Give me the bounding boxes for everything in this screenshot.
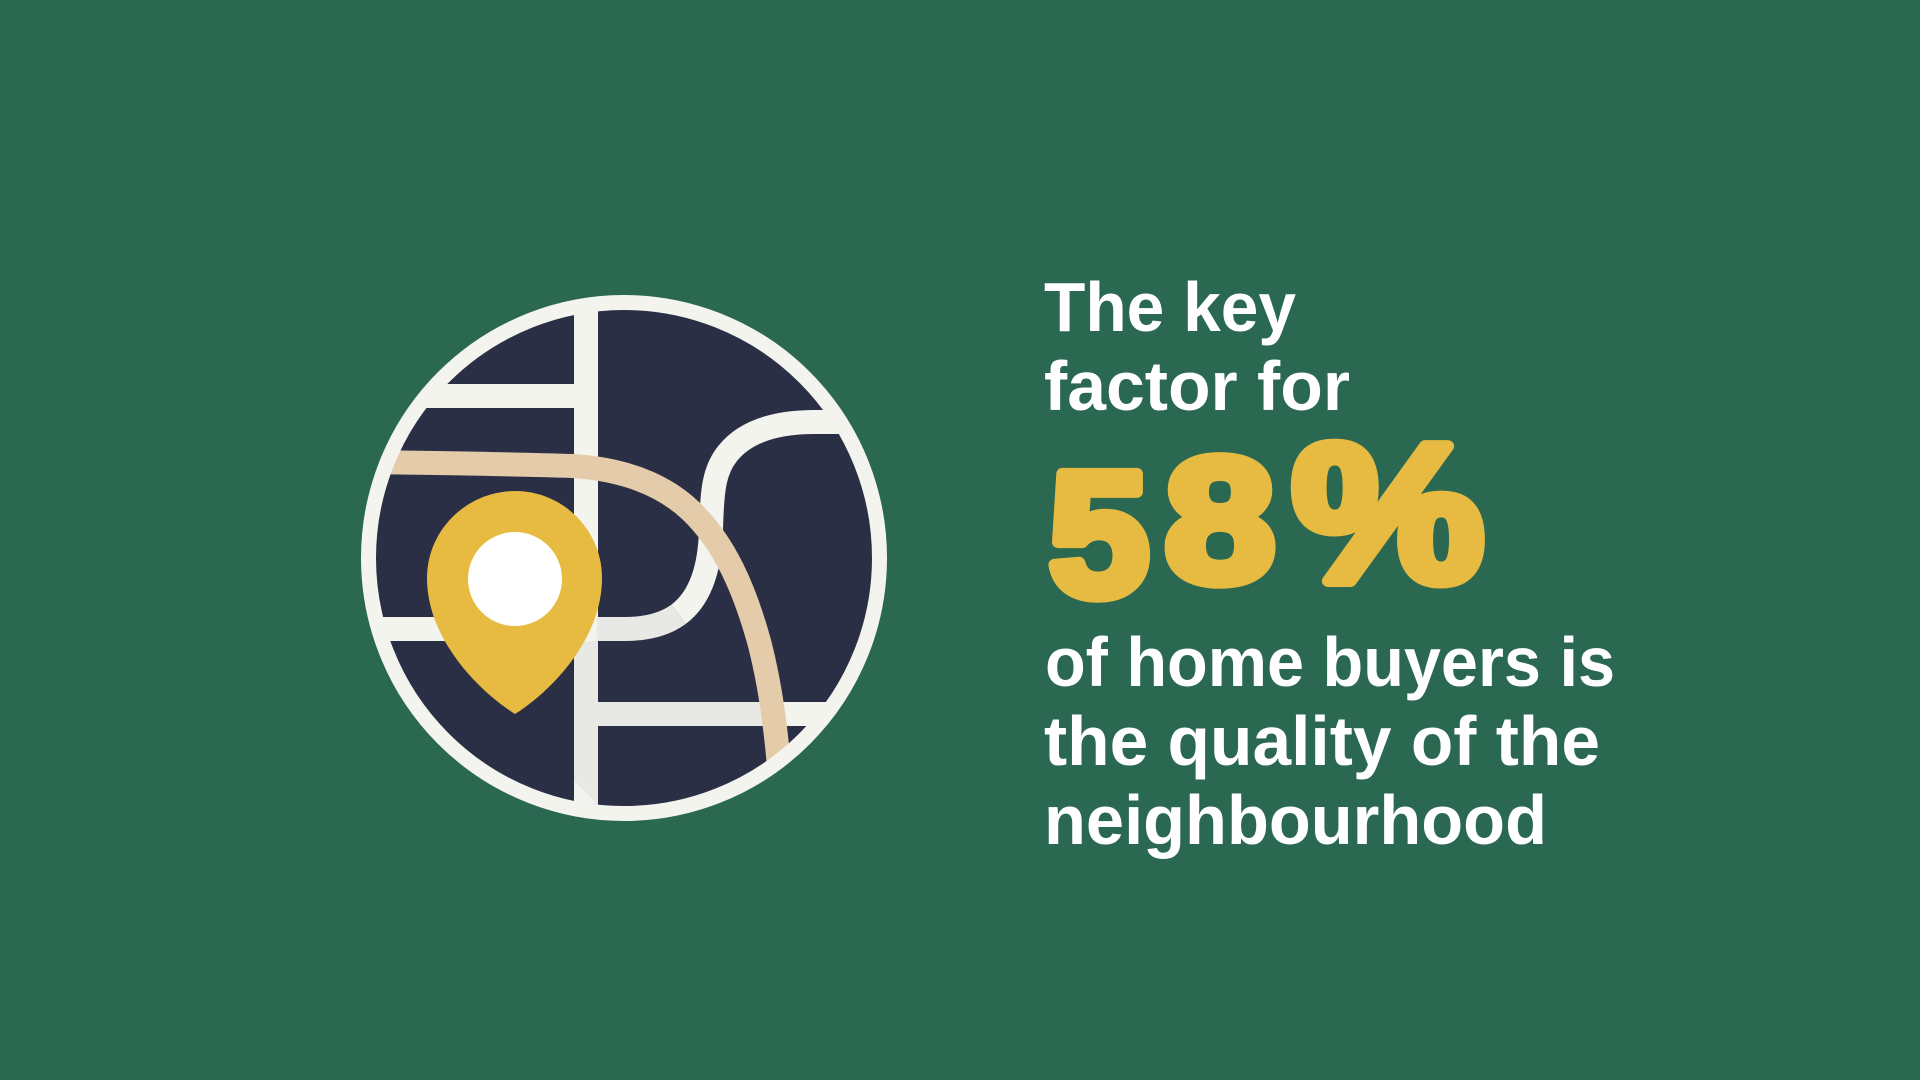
big number: 58%: 5 (1049, 437, 1149, 633)
map base disc (374, 308, 874, 808)
highlighted route (390, 450, 789, 761)
text: lead-in (1044, 268, 1350, 425)
infographic canvas (361, 280, 1612, 859)
text: conclusion: neighbourhood (1044, 781, 1547, 859)
outer ring (368, 302, 880, 814)
text: conclusion: of home buyers is (1045, 623, 1615, 701)
big number: 58% (1049, 404, 1484, 633)
big number: 58%: % (1292, 404, 1484, 623)
map illustration (360, 300, 880, 815)
icon: location pin (427, 491, 602, 714)
statistic text block (1044, 268, 1615, 859)
text: conclusion: the quality of the (1044, 702, 1600, 780)
text: lead-in: The key (1044, 268, 1296, 346)
big number: 58%: 8 (1165, 423, 1275, 619)
text: lead-in: factor for (1044, 347, 1350, 425)
street network (383, 311, 839, 805)
text: conclusion (1044, 623, 1615, 859)
